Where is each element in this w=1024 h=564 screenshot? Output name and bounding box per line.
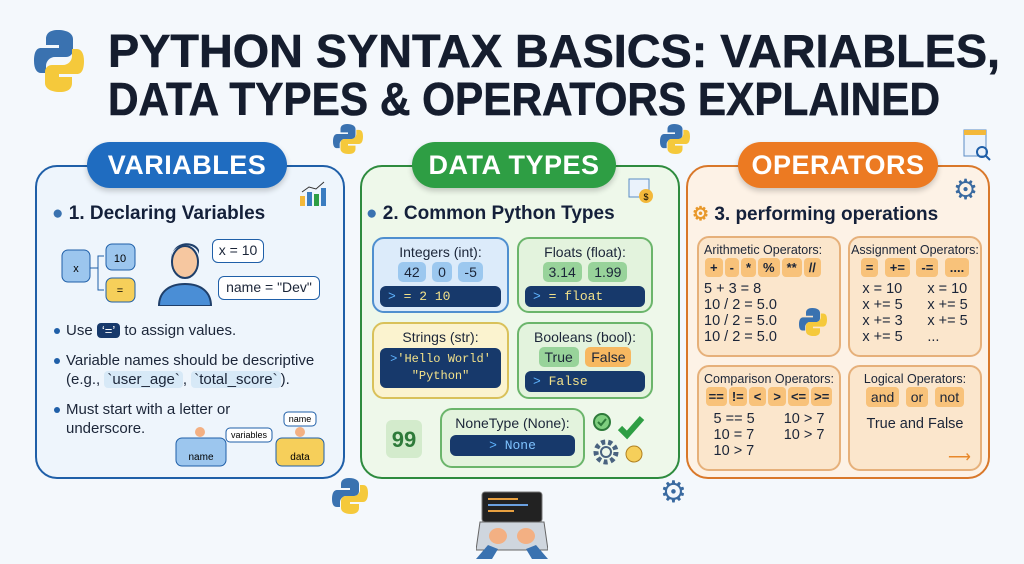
heading: common python types: ● 2. Common Python Types xyxy=(366,203,615,224)
diagram: variable cylinders xyxy=(62,244,136,302)
box: integers: -5 xyxy=(464,264,477,280)
icon: checks and gear xyxy=(593,413,644,464)
icon: person xyxy=(158,243,212,306)
icon: python in arithmetic xyxy=(799,308,827,336)
box: comparison: 10 > 7 xyxy=(784,411,824,427)
box: comparison: == xyxy=(709,389,724,404)
box: assignment: = xyxy=(866,260,873,275)
icon: quote: 99 xyxy=(392,427,416,452)
box: assignment: += xyxy=(890,260,905,275)
icon: python between panels 2 xyxy=(660,124,690,154)
box: nonetype: NoneType (None): xyxy=(455,415,570,431)
box: assignment xyxy=(848,236,982,357)
bullet: start with letter xyxy=(66,400,230,438)
box: integers: 0 xyxy=(438,264,446,280)
box: assignment: .... xyxy=(950,260,964,275)
box: integers xyxy=(372,237,509,313)
box: arithmetic: 10 / 2 = 5.0 xyxy=(704,313,777,329)
heading pill: operators: OPERATORS xyxy=(751,150,925,180)
box: logical: or xyxy=(911,389,923,405)
box: booleans: Booleans (bool): xyxy=(534,329,636,345)
title: PYTHON SYNTAX BASICS: VARIABLES, xyxy=(108,25,1000,77)
icon: gear bottom right: ⚙ xyxy=(660,476,687,509)
box: strings: "Python" xyxy=(412,369,469,383)
box: logical: and xyxy=(871,389,894,405)
box: comparison: < xyxy=(754,389,761,404)
icon: laptop xyxy=(476,492,548,559)
box: floats: Floats (float): xyxy=(544,244,626,260)
icon: dollar doc xyxy=(628,178,653,203)
panel: operators xyxy=(686,165,990,479)
icon: quote xyxy=(386,420,422,458)
box: floats: > = float xyxy=(533,289,603,304)
heading pill: operators xyxy=(738,142,938,188)
box: assignment: x += 5 xyxy=(927,313,968,329)
box: arithmetic: % xyxy=(763,260,775,275)
box: integers: > = 2 10 xyxy=(388,289,450,304)
callout: name = Dev: name = "Dev" xyxy=(226,279,312,295)
panel: data types xyxy=(360,165,680,479)
box: comparison: <= xyxy=(791,389,806,404)
bullet: descriptive names: Variable names should be descriptive xyxy=(66,352,314,369)
icon: python between panels 1 xyxy=(333,124,363,154)
box: assignment: x += 5 xyxy=(862,329,903,345)
box: comparison: 10 = 7 xyxy=(714,427,754,443)
bullet: start with letter: Must start with a letter or xyxy=(66,401,230,418)
box: arithmetic: // xyxy=(809,260,816,275)
box: assignment: x += 5 xyxy=(927,297,968,313)
box: arithmetic: Arithmetic Operators: xyxy=(704,243,822,257)
heading pill: variables: VARIABLES xyxy=(108,150,266,180)
box: strings xyxy=(372,322,509,399)
box: arithmetic: * xyxy=(746,260,751,275)
icon: gear: ⚙ xyxy=(953,174,978,205)
diagram: variable cylinders: x xyxy=(73,263,79,275)
icon: python bottom left xyxy=(332,478,368,514)
title xyxy=(34,25,1000,124)
bullet: use =: Use ‘=’ to assign values. xyxy=(66,322,236,339)
icon: document magnifier xyxy=(964,130,991,161)
diagram: variable cylinders: 10 xyxy=(114,253,126,265)
icon: dollar doc: $ xyxy=(643,192,649,202)
box: arithmetic: + xyxy=(710,260,718,275)
box: arithmetic: 10 / 2 = 5.0 xyxy=(704,329,777,345)
heading: performing operations: ⚙ 3. performing operations xyxy=(692,204,938,225)
heading: declaring variables: ● 1. Declaring Variables xyxy=(52,203,265,224)
diagram: name/data xyxy=(176,412,324,466)
diagram: name/data: variables xyxy=(231,430,268,440)
diagram: name/data: name xyxy=(188,452,214,463)
callout: x = 10 xyxy=(212,239,264,263)
box: comparison: 5 == 5 xyxy=(714,411,755,427)
icon: bar chart xyxy=(300,182,326,206)
box: nonetype xyxy=(440,408,585,468)
callout: name = Dev xyxy=(218,276,320,300)
title: DATA TYPES & OPERATORS EXPLAINED xyxy=(108,73,940,124)
box: assignment: x += 3 xyxy=(862,313,903,329)
bullet: descriptive names xyxy=(66,351,314,389)
box: nonetype: > None xyxy=(489,438,536,453)
box: arithmetic: 10 / 2 = 5.0 xyxy=(704,297,777,313)
heading pill: data types xyxy=(412,142,616,188)
box: booleans: > False xyxy=(533,374,588,389)
diagram: variable cylinders: = xyxy=(117,285,123,297)
icon: python logo xyxy=(34,30,84,92)
arrow: logical: ⟶ xyxy=(948,449,971,466)
box: strings: Strings (str): xyxy=(402,329,479,345)
heading pill: data types: DATA TYPES xyxy=(428,150,600,180)
box: booleans: True xyxy=(545,349,573,365)
box: strings: >'Hello World' xyxy=(390,352,491,366)
box: floats: 1.99 xyxy=(594,264,621,280)
box: comparison: Comparison Operators: xyxy=(704,372,834,386)
box: comparison: 10 > 7 xyxy=(784,427,824,443)
box: logical: True and False xyxy=(866,416,963,432)
diagram: name/data: data xyxy=(290,452,310,463)
box: floats xyxy=(517,237,653,313)
box: assignment: -= xyxy=(921,260,933,275)
box: assignment: x = 10 xyxy=(927,281,967,297)
box: logical: not xyxy=(940,389,959,405)
box: comparison xyxy=(697,365,841,471)
box: integers: 42 xyxy=(404,264,420,280)
box: booleans xyxy=(517,322,653,399)
callout: x = 10: x = 10 xyxy=(219,242,257,258)
diagram: name/data: name xyxy=(289,414,311,424)
box: logical xyxy=(848,365,982,471)
box: assignment: Assignment Operators: xyxy=(851,243,979,257)
panel: variables xyxy=(35,165,345,479)
box: comparison: != xyxy=(732,389,744,404)
box: logical: Logical Operators: xyxy=(864,372,966,386)
box: arithmetic xyxy=(697,236,841,357)
bullet: start with letter: underscore. xyxy=(66,420,145,437)
box: comparison: > xyxy=(773,389,781,404)
heading pill: variables xyxy=(87,142,287,188)
box: arithmetic: 5 + 3 = 8 xyxy=(704,281,761,297)
box: arithmetic: ** xyxy=(787,260,797,275)
box: assignment: x += 5 xyxy=(862,297,903,313)
box: booleans: False xyxy=(591,349,625,365)
box: comparison: >= xyxy=(814,389,829,404)
box: integers: Integers (int): xyxy=(399,244,482,260)
box: assignment: x = 10 xyxy=(862,281,902,297)
box: comparison: 10 > 7 xyxy=(714,443,754,459)
bullet: descriptive names: (e.g., `user_age`, `total_score`). xyxy=(66,371,290,388)
box: arithmetic: - xyxy=(730,260,734,275)
box: assignment: ... xyxy=(927,329,939,345)
box: floats: 3.14 xyxy=(549,264,576,280)
